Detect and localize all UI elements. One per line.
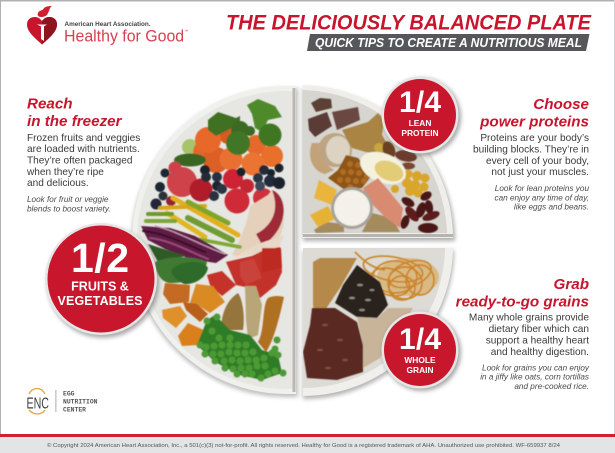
badge: 1/4 lean protein: PROTEIN [401,128,439,138]
badge: 1/4 whole grain: GRAIN [406,365,434,375]
food: yellow chickpeas [391,170,430,198]
icon: heart and torch [27,6,57,44]
food: yogurt bowl [331,187,373,229]
food: white rice [357,308,413,368]
food: wild rice [303,308,363,380]
heading: grab ready-to-go grains: ready-to-go grains [456,294,589,310]
badge: 1/2 fruits and vegetables: VEGETABLES [58,294,142,308]
body text: whole grains: support a healthy heart [486,336,589,346]
tip: lean proteins: can enjoy any time of day, [494,194,589,202]
Egg Nutrition Center name: NUTRITION [63,398,98,406]
food: black rice [335,265,388,318]
badge: 1/4 whole grain: WHOLE [404,355,436,365]
ENC letters: ENC [26,396,49,412]
food: bell peppers [146,198,240,247]
food: carrots [182,126,283,176]
badge: 1/4 lean protein: 1/4 [399,86,441,119]
tip: quick grains: Look for grains you can enjoy [482,364,590,372]
heading: choose power proteins: Choose [533,96,590,113]
food: beef [308,98,360,137]
food: blueberries [150,164,285,210]
heading: choose power proteins: power proteins [479,114,589,130]
food: spinach [148,244,208,284]
tip: blends: Look for fruit or veggie [27,195,109,204]
food: roasted potato wedges [221,286,284,352]
food: green peas [196,314,286,382]
body text: frozen fruits: when they’re ripe [26,167,104,178]
food: pasta [355,252,439,301]
body text: proteins: building blocks. They’re in [473,144,589,156]
body text: whole grains: and healthy digestion. [491,347,589,358]
badge: 1/4 lean protein [382,76,461,156]
plate: whole grain quarter [303,248,454,399]
heading: grab ready-to-go grains: Grab [554,276,589,293]
body text: proteins: every cell of your body, [486,156,589,167]
food: tomatoes [207,247,282,298]
food: nuts [342,113,418,170]
food: chicken [310,133,352,174]
badge: 1/2 fruits and vegetables: 1/2 [71,235,129,281]
body text: frozen fruits: They’re often packaged [27,156,132,166]
body text: frozen fruits: are loaded with nutrients. [27,144,140,155]
icon: ENC egg arcs [29,388,45,414]
food: whole grain bits [314,213,400,233]
heading: reach in the freezer: in the freezer [27,113,123,130]
food: boiled egg [359,151,407,186]
title: THE DELICIOUSLY BALANCED PLATE [226,12,592,34]
food: red cabbage [141,226,228,263]
tip: quick grains: in a jiffy like oats, corn tortillas [480,372,589,382]
copyright line: © Copyright 2024 American Heart Association, Inc., a 501(c)(3) not-for-profit. All rights reserved. Healthy for Good is a registered trademark of AHA. Unauthorized use prohibited. WF-659937 8/24 [47,442,560,449]
Egg Nutrition Center name: CENTER [63,406,86,414]
logo: American Heart Association Healthy for Good [27,6,188,46]
food: salmon [363,178,403,228]
tip: blends: blends to boost variety. [27,204,111,214]
badge: 1/4 whole grain: 1/4 [399,323,441,356]
footer [0,434,615,453]
body text: frozen fruits: and delicious. [27,178,89,189]
body text: whole grains: dietary fiber which can [489,324,589,335]
plate: fruits and vegetables half [132,86,298,397]
body text: whole grains: Many whole grains provide [469,312,589,324]
food: chickpeas [328,155,372,190]
logo: Egg Nutrition Center [26,388,98,414]
food: strawberries [167,162,273,214]
tip: lean proteins: like eggs and beans. [514,202,589,212]
heading: reach in the freezer: Reach [27,96,73,112]
Healthy for Good wordmark: ™ [184,28,188,34]
food: apple slices [232,190,284,258]
body text: proteins: Proteins are your body’s [480,133,589,144]
plate: lean protein quarter [303,85,455,241]
Egg Nutrition Center name: EGG [63,390,75,398]
badge: 1/2 fruits and vegetables [45,223,159,338]
food: sweet potato [162,283,225,346]
tip: lean proteins: Look for lean proteins you [495,184,589,193]
badge: 1/4 lean protein: LEAN [409,118,431,128]
body text: proteins: not just your muscles. [491,167,589,178]
panel: freezer tips [26,96,140,214]
subtitle banner: QUICK TIPS TO CREATE A NUTRITIOUS MEAL [315,36,582,50]
panel: grain tips [456,276,590,391]
food: cheese cubes [310,180,337,227]
food: toast [312,257,358,309]
panel: protein tips [473,96,590,212]
tip: quick grains: and pre-cooked rice. [514,382,589,391]
food: kidney beans [399,190,441,233]
badge: 1/2 fruits and vegetables: FRUITS & [71,280,129,294]
organization name: American Heart Association. [64,21,151,28]
body text: frozen fruits: Frozen fruits and veggies [27,133,140,144]
food: broccoli [174,99,282,166]
badge: 1/4 whole grain [382,312,461,391]
Healthy for Good wordmark: Healthy for Good [64,28,189,46]
